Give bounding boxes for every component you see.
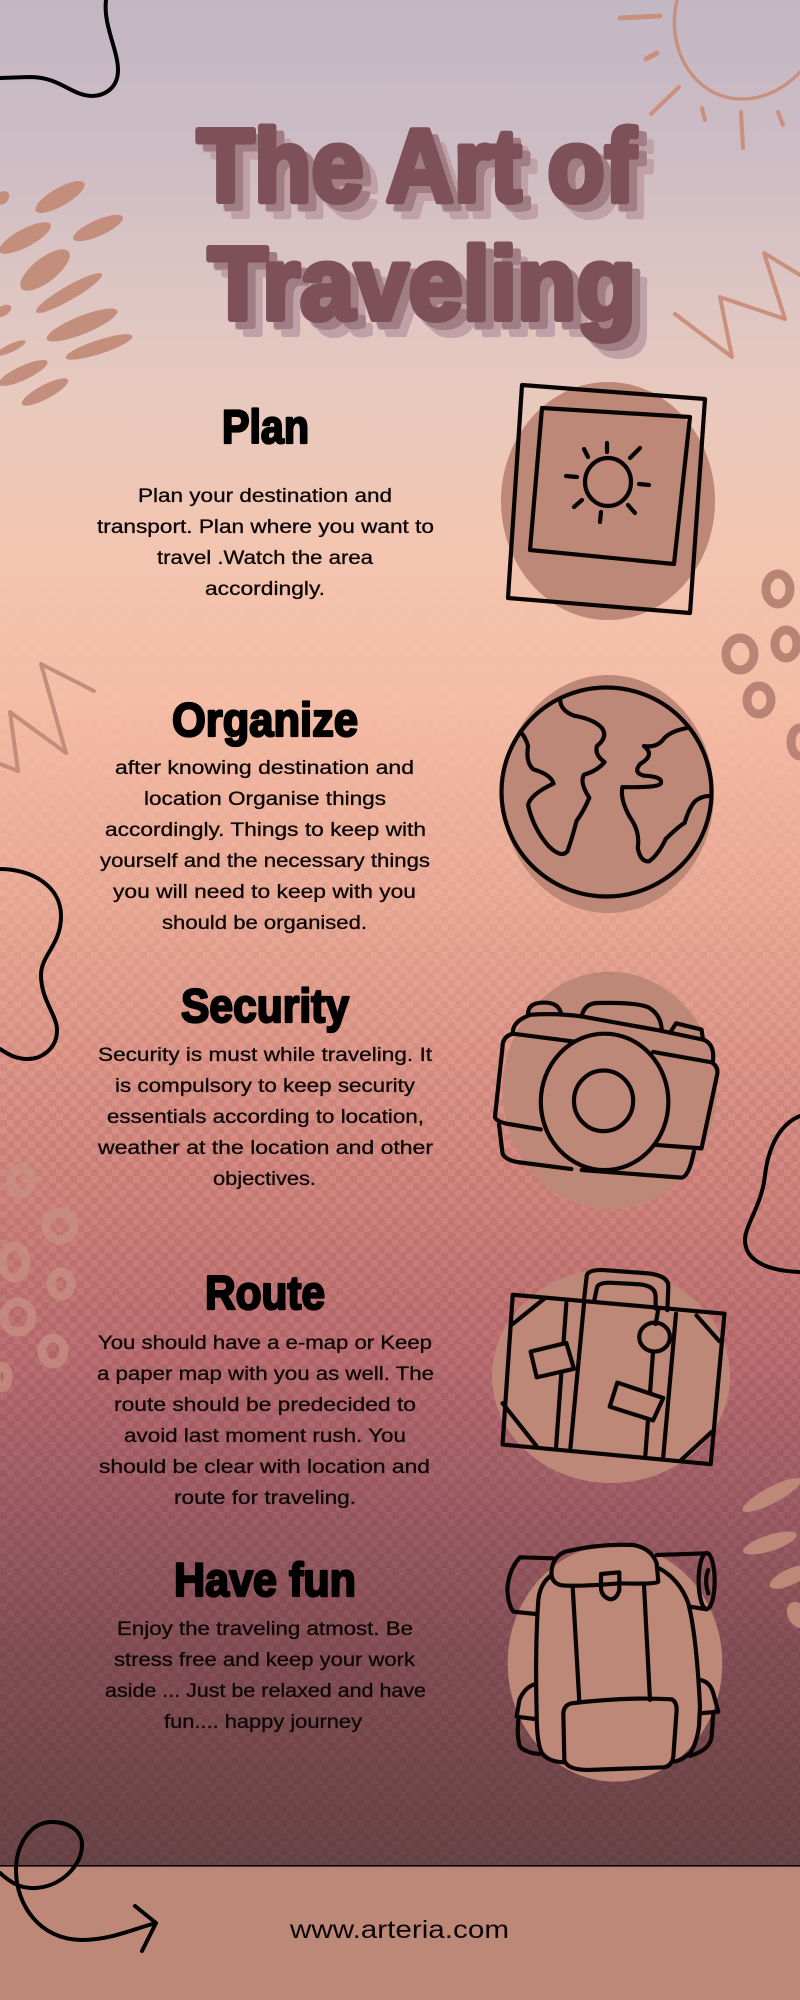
title: The Art of [197, 108, 637, 223]
text block: plan [97, 486, 434, 600]
icon: backpack [507, 1545, 722, 1782]
text block: have fun: aside ... Just be relaxed and have [105, 1681, 426, 1702]
heading: security: Security [181, 979, 349, 1032]
title [197, 108, 637, 341]
title: Traveling [208, 226, 636, 341]
text block: organize: you will need to keep with you [113, 882, 416, 903]
text block: security [97, 1045, 434, 1190]
decoration: left black squiggle [0, 869, 61, 1059]
text block: organize: location Organise things [144, 789, 386, 810]
footer website: www.arteria.com [289, 1916, 509, 1944]
text block: route: a paper map with you as well. The [97, 1364, 434, 1385]
text block: have fun: stress free and keep your work [114, 1650, 416, 1671]
panel: plan [97, 382, 715, 620]
icon: globe [502, 675, 714, 913]
decoration: right rings [726, 574, 800, 756]
panel: route [97, 1266, 730, 1509]
heading: plan: Plan [222, 400, 309, 453]
text block: organize [100, 758, 430, 934]
icon: polaroid photo [501, 382, 715, 620]
text block: security: Security is must while traveling. It [98, 1045, 433, 1066]
text block: plan: Plan your destination and [138, 486, 392, 507]
text block: plan: travel .Watch the area [157, 548, 373, 569]
text block: organize: accordingly. Things to keep with [105, 820, 426, 841]
icon: suitcase [492, 1269, 730, 1483]
text block: route: route should be predecided to [114, 1395, 416, 1416]
panel: organize [100, 675, 714, 934]
text block: security: objectives. [213, 1169, 316, 1190]
text block: route [97, 1333, 434, 1509]
text block: organize: after knowing destination and [115, 758, 414, 779]
icon: camera [495, 972, 717, 1209]
text block: organize: should be organised. [162, 913, 367, 934]
icon: sun outline top right [620, 0, 800, 148]
heading: route: Route [205, 1266, 325, 1319]
decoration: left mid zigzag [0, 664, 94, 771]
text block: plan: accordingly. [205, 579, 325, 600]
text block: route: avoid last moment rush. You [124, 1426, 406, 1447]
text block: have fun [105, 1619, 426, 1733]
decoration: left rings [0, 1168, 74, 1388]
arrow: looped black arrow [0, 1822, 156, 1951]
text block: security: weather at the location and other [97, 1138, 434, 1159]
decoration: right black squiggle [745, 1116, 800, 1272]
decoration: left brush strokes [0, 175, 134, 410]
text block: security: is compulsory to keep security [115, 1076, 416, 1097]
text block: route: should be clear with location and [99, 1457, 430, 1478]
text block: route: You should have a e-map or Keep [98, 1333, 432, 1354]
decoration: top left black squiggle [0, 0, 118, 96]
text block: plan: transport. Plan where you want to [97, 517, 434, 538]
heading: organize: Organize [172, 693, 358, 746]
decoration: top right zigzag [675, 253, 800, 357]
text block: have fun: Enjoy the traveling atmost. Be [117, 1619, 413, 1640]
heading: have fun: Have fun [174, 1553, 356, 1606]
footer band [0, 1865, 800, 2000]
text block: have fun: fun.... happy journey [164, 1712, 363, 1733]
decoration: right brush strokes [739, 1472, 800, 1632]
text block: route: route for traveling. [174, 1488, 356, 1509]
panel: security [97, 972, 717, 1209]
text block: security: essentials according to location, [107, 1107, 424, 1128]
text block: organize: yourself and the necessary things [100, 851, 430, 872]
panel: have fun [105, 1545, 722, 1782]
